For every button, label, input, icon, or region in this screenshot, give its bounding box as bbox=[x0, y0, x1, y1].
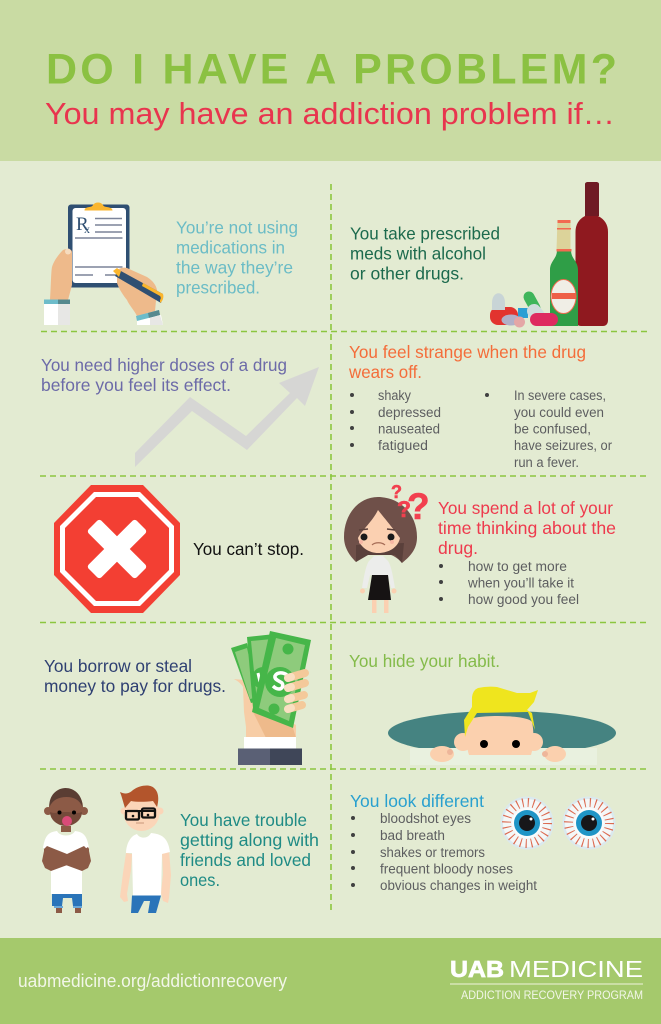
text: not using as prescribed bbox=[176, 218, 298, 298]
list: thoughts bbox=[439, 559, 579, 607]
list: severe cases: you could even bbox=[514, 405, 604, 420]
panel: thinking about the drug bbox=[344, 482, 616, 613]
panel: borrow or steal bbox=[44, 631, 311, 765]
icon: rising arrow bbox=[135, 367, 319, 467]
icon: wine bottle bbox=[576, 182, 608, 326]
text: can't stop: You can’t stop. bbox=[193, 539, 304, 559]
list: thoughts: how to get more bbox=[468, 559, 567, 574]
text: meds with alcohol: meds with alcohol bbox=[350, 244, 486, 264]
logo: UAB Medicine: UAB bbox=[450, 956, 504, 982]
text: meds with alcohol: You take prescribed bbox=[350, 224, 500, 244]
panel: look different bbox=[350, 791, 616, 893]
list: symptoms: depressed bbox=[378, 405, 441, 420]
list: severe cases: be confused, bbox=[514, 422, 591, 436]
panel: trouble getting along bbox=[42, 786, 319, 913]
icon: question marks: ? bbox=[407, 486, 430, 527]
text: trouble getting along: You have trouble bbox=[180, 810, 307, 830]
logo: UAB Medicine: ADDICTION RECOVERY PROGRAM bbox=[461, 988, 643, 1002]
icon: pills bbox=[490, 293, 558, 328]
heading: thinking about the drug: time thinking about the bbox=[438, 518, 616, 538]
icon: bloodshot eye right bbox=[562, 796, 616, 850]
panel: hide your habit bbox=[349, 651, 616, 765]
icon: man with crossed arms bbox=[42, 788, 91, 913]
text: trouble getting along: ones. bbox=[180, 870, 220, 890]
icon: clipboard with hands: x bbox=[84, 222, 90, 236]
list: severe cases: have seizures, or bbox=[514, 438, 612, 453]
footer url: uabmedicine.org/addictionrecovery bbox=[18, 971, 287, 991]
icon: worried woman bbox=[344, 497, 417, 613]
list: look different signs bbox=[351, 811, 537, 893]
icon: hand holding money bbox=[231, 631, 311, 765]
text: borrow or steal: money to pay for drugs. bbox=[44, 676, 226, 696]
heading: feel strange: wears off. bbox=[348, 362, 422, 382]
text: not using as prescribed: prescribed. bbox=[176, 278, 260, 298]
icon: question marks: ? bbox=[391, 482, 402, 502]
heading: look different: You look different bbox=[350, 791, 484, 811]
heading: thinking about the drug: You spend a lot of your bbox=[438, 498, 613, 518]
text: trouble getting along: getting along with bbox=[180, 830, 319, 850]
logo: UAB Medicine bbox=[450, 956, 643, 1002]
list: symptoms: fatigued bbox=[378, 438, 428, 453]
footer band bbox=[0, 938, 661, 1024]
icon: man peeking from hole bbox=[388, 687, 616, 765]
text: higher doses: You need higher doses of a drug bbox=[41, 355, 287, 375]
list: thoughts: how good you feel bbox=[468, 592, 579, 607]
text: trouble getting along: friends and loved bbox=[180, 850, 311, 870]
icon: beer bottle bbox=[550, 220, 578, 326]
icon: clipboard with hands bbox=[44, 202, 163, 325]
text: not using as prescribed: You’re not using bbox=[176, 218, 298, 238]
text: higher doses bbox=[41, 355, 287, 395]
icon: question marks bbox=[391, 482, 430, 527]
text: trouble getting along bbox=[180, 810, 319, 890]
icon: man with glasses bbox=[120, 786, 171, 913]
logo: UAB Medicine: MEDICINE bbox=[509, 956, 643, 982]
heading: feel strange bbox=[348, 342, 586, 382]
list: symptoms: nauseated bbox=[378, 422, 440, 436]
heading: thinking about the drug: drug. bbox=[438, 538, 478, 558]
list: severe cases: In severe cases, bbox=[514, 388, 606, 403]
header band bbox=[0, 0, 661, 161]
text: not using as prescribed: the way they’re bbox=[176, 258, 293, 278]
icon: bloodshot eye left bbox=[500, 796, 554, 850]
panel: feel strange bbox=[348, 342, 612, 470]
icon: question marks: ? bbox=[397, 496, 411, 522]
title: DO I HAVE A PROBLEM? bbox=[46, 46, 617, 94]
subtitle: You may have an addiction problem if… bbox=[45, 96, 615, 131]
list: symptoms bbox=[350, 388, 441, 453]
panel: not using as prescribed bbox=[44, 202, 298, 325]
list: severe cases: run a fever. bbox=[514, 455, 579, 470]
text: meds with alcohol bbox=[350, 224, 500, 284]
list: thoughts: when you’ll take it bbox=[467, 576, 574, 590]
icon: stop sign bbox=[54, 485, 180, 613]
text: borrow or steal bbox=[44, 656, 226, 696]
list: symptoms: shaky bbox=[378, 388, 411, 403]
panel: meds with alcohol bbox=[350, 182, 608, 328]
heading: thinking about the drug bbox=[438, 498, 616, 558]
list: look different signs: frequent bloody noses bbox=[380, 862, 513, 876]
list: look different signs: shakes or tremors bbox=[380, 845, 485, 860]
heading: feel strange: You feel strange when the drug bbox=[349, 342, 586, 362]
text: higher doses: before you feel its effect. bbox=[41, 375, 231, 395]
text: meds with alcohol: or other drugs. bbox=[350, 264, 464, 284]
list: look different signs: bloodshot eyes bbox=[380, 811, 471, 826]
icon: clipboard with hands: R bbox=[76, 214, 89, 235]
panel: can't stop bbox=[54, 485, 304, 613]
panel: higher doses bbox=[41, 355, 319, 467]
list: look different signs: bad breath bbox=[380, 828, 445, 843]
list: look different signs: obvious changes in weight bbox=[380, 878, 537, 893]
text: hide your habit: You hide your habit. bbox=[349, 651, 500, 671]
text: borrow or steal: You borrow or steal bbox=[44, 656, 192, 676]
list: severe cases bbox=[485, 388, 612, 470]
text: not using as prescribed: medications in bbox=[176, 238, 285, 258]
